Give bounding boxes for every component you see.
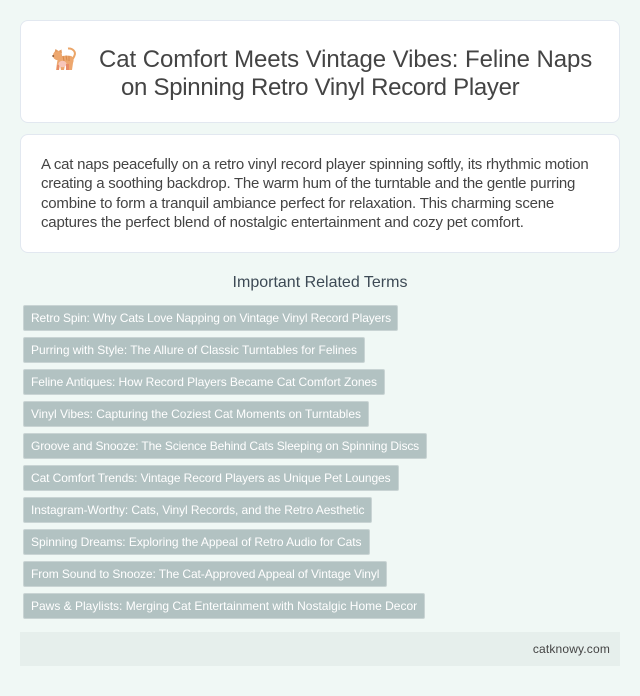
tag 3: Feline Antiques: How Record Players Became Cat Comfort Zones: [31, 375, 377, 389]
tag 4: Vinyl Vibes: Capturing the Coziest Cat Moments on Turntables: [31, 407, 361, 421]
tag 1: [23, 305, 398, 331]
panel: description: captures the perfect blend of nostalgic entertainment and cozy pet comfort.: [41, 214, 524, 231]
tag 8: Spinning Dreams: Exploring the Appeal of Retro Audio for Cats: [31, 535, 361, 549]
heading: related terms: Important Related Terms: [233, 274, 407, 291]
tag 9: [23, 561, 387, 587]
tag 4: [23, 401, 369, 427]
title: Cat Comfort Meets Vintage Vibes: Feline Naps: [99, 46, 592, 73]
tag 2: Purring with Style: The Allure of Classic Turntables for Felines: [31, 343, 357, 357]
panel: description: [20, 134, 620, 253]
panel: description: creating a soothing backdrop. The warm hum of the turntable and the gentle purring: [41, 175, 575, 192]
panel: title card: [20, 20, 620, 123]
footer: [20, 632, 620, 666]
tag 7: Instagram-Worthy: Cats, Vinyl Records, and the Retro Aesthetic: [31, 503, 364, 517]
tag 7: [23, 497, 372, 523]
icon: cat: [52, 48, 76, 70]
tag 8: [23, 529, 370, 555]
tag 10: Paws & Playlists: Merging Cat Entertainment with Nostalgic Home Decor: [31, 599, 417, 613]
tag 3: [23, 369, 385, 395]
title: on Spinning Retro Vinyl Record Player: [121, 74, 519, 101]
tag 9: From Sound to Snooze: The Cat-Approved Appeal of Vintage Vinyl: [31, 567, 379, 581]
tag 10: [23, 593, 425, 619]
footer source: catknowy.com: [533, 642, 610, 656]
panel: description: combine to form a tranquil ambiance perfect for relaxation. This charming scene: [41, 195, 554, 212]
tag 6: [23, 465, 399, 491]
tag 5: Groove and Snooze: The Science Behind Cats Sleeping on Spinning Discs: [31, 439, 419, 453]
tag 6: Cat Comfort Trends: Vintage Record Players as Unique Pet Lounges: [31, 471, 391, 485]
tag 5: [23, 433, 427, 459]
tag 1: Retro Spin: Why Cats Love Napping on Vintage Vinyl Record Players: [31, 311, 391, 325]
list: related term tags: [23, 305, 427, 619]
panel: description: A cat naps peacefully on a retro vinyl record player spinning softly, its rhythmic motion: [41, 156, 588, 173]
tag 2: [23, 337, 365, 363]
title: [99, 46, 592, 101]
